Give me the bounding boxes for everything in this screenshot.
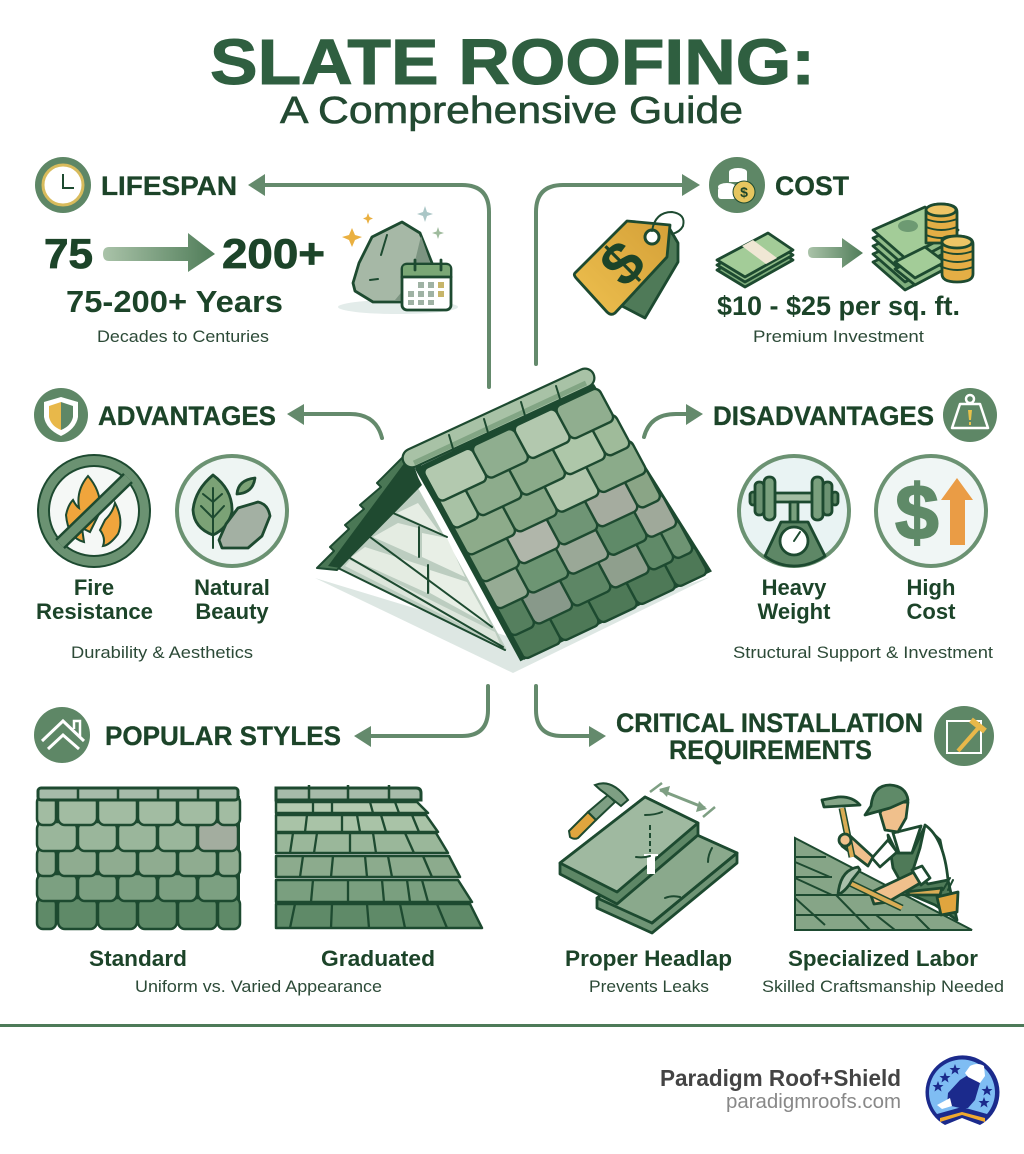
heading: critical installation requirements: CRITICAL INSTALLATION bbox=[616, 708, 923, 738]
icon: no fire bbox=[37, 454, 151, 568]
label: natural beauty: Beauty bbox=[195, 599, 269, 624]
label: fire resistance: Resistance bbox=[36, 599, 153, 624]
lower arm bbox=[870, 872, 922, 904]
heading: cost: COST bbox=[775, 171, 849, 201]
icon: coins bbox=[709, 157, 765, 213]
heading: critical installation requirements bbox=[616, 708, 923, 765]
label: natural beauty: Natural bbox=[194, 575, 270, 600]
text: structural support and investment: Structural Support & Investment bbox=[733, 643, 993, 662]
footer brand bbox=[660, 1065, 901, 1113]
icon: dollar and up arrow: $ bbox=[895, 468, 939, 556]
panel: advantages bbox=[34, 388, 287, 662]
text: price: $10 - $25 per sq. ft. bbox=[717, 291, 960, 321]
title: SLATE ROOFING: bbox=[210, 26, 815, 98]
arrow: roof to critical installation bbox=[536, 686, 606, 747]
icon: hammer bbox=[569, 783, 628, 839]
panel: cost bbox=[574, 157, 973, 346]
icon: large money and coins bbox=[873, 204, 973, 290]
title bbox=[210, 26, 815, 132]
icon: leaf and stone bbox=[177, 456, 287, 566]
number: 200+: 200+ bbox=[222, 230, 325, 277]
rake trim bbox=[317, 452, 422, 570]
arrow: roof to advantages bbox=[287, 404, 382, 438]
icon: weight warning bbox=[943, 388, 997, 442]
icon: small money stack bbox=[717, 233, 793, 287]
illustration: slate roof bbox=[315, 377, 712, 673]
text: skilled craftsmanship needed: Skilled Craftsmanship Needed bbox=[762, 977, 1004, 996]
label: proper headlap: Proper Headlap bbox=[565, 946, 732, 971]
icon: clock bbox=[35, 157, 91, 213]
icon: rock and calendar bbox=[338, 222, 458, 314]
arrow: 75 to 200+ bbox=[103, 233, 215, 272]
icon: house bbox=[34, 707, 90, 763]
heading: critical installation requirements: REQUIREMENTS bbox=[669, 735, 872, 765]
raised hammer bbox=[842, 808, 852, 857]
logo: eagle badge bbox=[925, 1055, 1000, 1125]
arrow: roof to disadvantages bbox=[644, 404, 703, 437]
working hammer bbox=[850, 883, 902, 908]
icon: coins: $ bbox=[740, 184, 748, 200]
illustration: graduated slate bbox=[276, 785, 482, 928]
illustration: standard slate bbox=[37, 788, 240, 929]
text: years: 75-200+ Years bbox=[66, 284, 283, 319]
text: prevents leaks: Prevents Leaks bbox=[589, 977, 709, 996]
footer brand: Paradigm Roof+Shield bbox=[660, 1065, 901, 1091]
gable wall bbox=[338, 486, 507, 650]
icon: dollar and up arrow bbox=[876, 456, 986, 566]
arrow: roof to cost bbox=[536, 174, 700, 364]
text: durability and aesthetics: Durability & Aesthetics bbox=[71, 643, 253, 662]
footer brand: paradigmroofs.com bbox=[726, 1091, 901, 1113]
icon text: dollar sign: $ bbox=[587, 228, 658, 299]
worker collar bbox=[893, 826, 921, 853]
text: decades to centuries: Decades to Centuries bbox=[97, 327, 269, 346]
arrow: headlap dimension bbox=[650, 783, 715, 817]
illustration: roofer at work bbox=[795, 785, 972, 930]
panel: critical installation requirements bbox=[560, 706, 1004, 996]
icon: shield bbox=[34, 388, 88, 442]
footer divider bbox=[0, 1024, 1024, 1027]
heading: advantages: ADVANTAGES bbox=[98, 401, 276, 431]
roof tile field bbox=[415, 377, 712, 662]
panel: disadvantages bbox=[713, 388, 997, 662]
worker upper arm bbox=[913, 825, 948, 884]
arrow: roof to lifespan bbox=[248, 174, 489, 387]
arrow: roof to popular styles bbox=[354, 686, 488, 747]
panel: lifespan bbox=[35, 157, 458, 346]
ridge cap bbox=[412, 378, 586, 463]
label: high cost bbox=[907, 575, 956, 624]
label: heavy weight: Weight bbox=[758, 599, 831, 624]
arrow: small to large cost bbox=[808, 238, 863, 268]
ground shadow bbox=[315, 577, 710, 673]
panel: popular styles bbox=[34, 707, 482, 996]
heading: disadvantages: DISADVANTAGES bbox=[713, 401, 934, 431]
raised arm bbox=[842, 834, 873, 866]
icon: dumbbell on scale bbox=[739, 456, 849, 566]
label: specialized labor: Specialized Labor bbox=[788, 946, 978, 971]
icon: sparkles bbox=[342, 206, 444, 247]
label: high cost: Cost bbox=[907, 599, 956, 624]
icon: price tag bbox=[574, 212, 684, 318]
heading: lifespan: LIFESPAN bbox=[101, 171, 237, 201]
label: heavy weight: Heavy bbox=[762, 575, 827, 600]
number: 75: 75 bbox=[44, 230, 93, 277]
label: graduated: Graduated bbox=[321, 946, 435, 971]
label: standard: Standard bbox=[89, 946, 187, 971]
worker apron bbox=[888, 826, 957, 920]
label: high cost: High bbox=[907, 575, 955, 600]
roof left edge bbox=[418, 466, 523, 660]
roof surface bbox=[795, 838, 972, 930]
label: fire resistance: Fire bbox=[74, 575, 114, 600]
label: fire resistance bbox=[36, 575, 153, 624]
worker left sleeve bbox=[872, 840, 897, 867]
label: natural beauty bbox=[194, 575, 270, 624]
label: heavy weight bbox=[758, 575, 831, 624]
title: A Comprehensive Guide bbox=[280, 90, 743, 132]
tool belt bbox=[905, 888, 942, 895]
text: premium investment: Premium Investment bbox=[753, 327, 924, 346]
icon: blueprint and hammer bbox=[934, 706, 994, 766]
worker head and helmet bbox=[880, 802, 908, 832]
illustration: headlap slates bbox=[560, 797, 737, 933]
text: uniform vs varied: Uniform vs. Varied Appearance bbox=[135, 977, 382, 996]
heading: popular styles: POPULAR STYLES bbox=[105, 721, 341, 751]
